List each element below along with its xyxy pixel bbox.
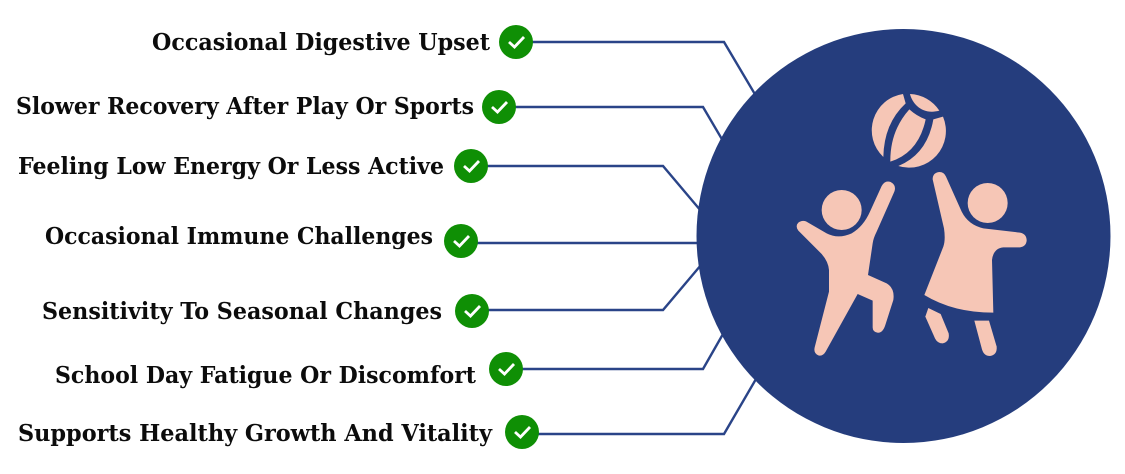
connector lines <box>475 42 756 434</box>
check icon 7 <box>505 415 539 449</box>
label: Slower Recovery After Play Or Sports: Slower Recovery After Play Or Sports <box>16 92 474 120</box>
check icon 4 <box>444 224 478 258</box>
label: Occasional Immune Challenges: Occasional Immune Challenges <box>45 222 433 250</box>
check icon 3 <box>454 149 488 183</box>
label: Occasional Digestive Upset: Occasional Digestive Upset <box>152 28 490 56</box>
check icon 2 <box>482 90 516 124</box>
central circle <box>696 29 1110 443</box>
label: Sensitivity To Seasonal Changes: Sensitivity To Seasonal Changes <box>42 297 442 325</box>
check icon 6 <box>489 352 523 386</box>
check icon 1 <box>499 25 533 59</box>
icon: ball <box>872 94 946 168</box>
label: Feeling Low Energy Or Less Active: Feeling Low Energy Or Less Active <box>18 152 444 180</box>
label: School Day Fatigue Or Discomfort: School Day Fatigue Or Discomfort <box>55 361 476 389</box>
icon: girl <box>924 172 1027 356</box>
check icon 5 <box>455 294 489 328</box>
label: Supports Healthy Growth And Vitality: Supports Healthy Growth And Vitality <box>18 419 493 447</box>
icon: boy <box>797 181 895 356</box>
icon: children playing with ball <box>797 94 1027 356</box>
